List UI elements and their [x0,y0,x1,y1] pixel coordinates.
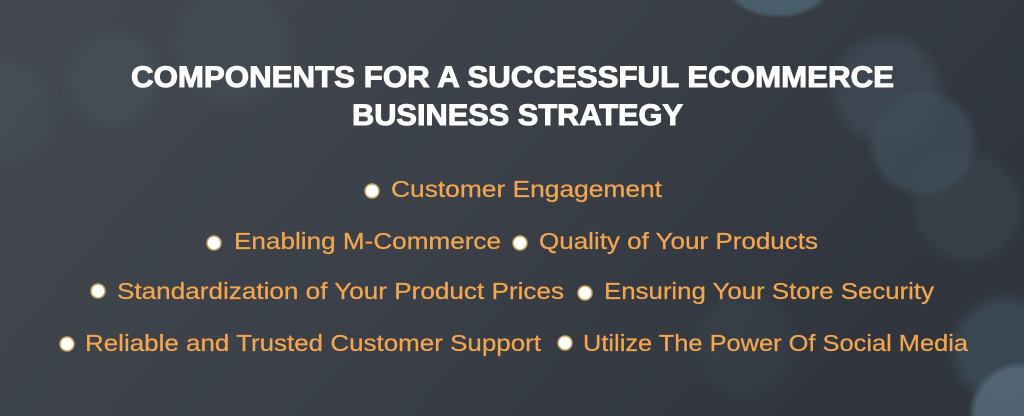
title: BUSINESS STRATEGY [352,99,683,132]
title [131,61,894,132]
title: COMPONENTS FOR A SUCCESSFUL ECOMMERCE [131,61,894,94]
list item: Utilize The Power Of Social Media: Utilize The Power Of Social Media [583,330,969,356]
list item: Reliable and Trusted Customer Support: Reliable and Trusted Customer Support [85,330,542,356]
list item: Ensuring Your Store Security: Ensuring Your Store Security [604,278,934,304]
list item: Quality of Your Products: Quality of Your Products [539,228,818,254]
list item: Customer Engagement: Customer Engagement [391,176,663,202]
list item: Standardization of Your Product Prices: Standardization of Your Product Prices [117,278,564,304]
list item: Enabling M-Commerce: Enabling M-Commerce [234,228,501,254]
